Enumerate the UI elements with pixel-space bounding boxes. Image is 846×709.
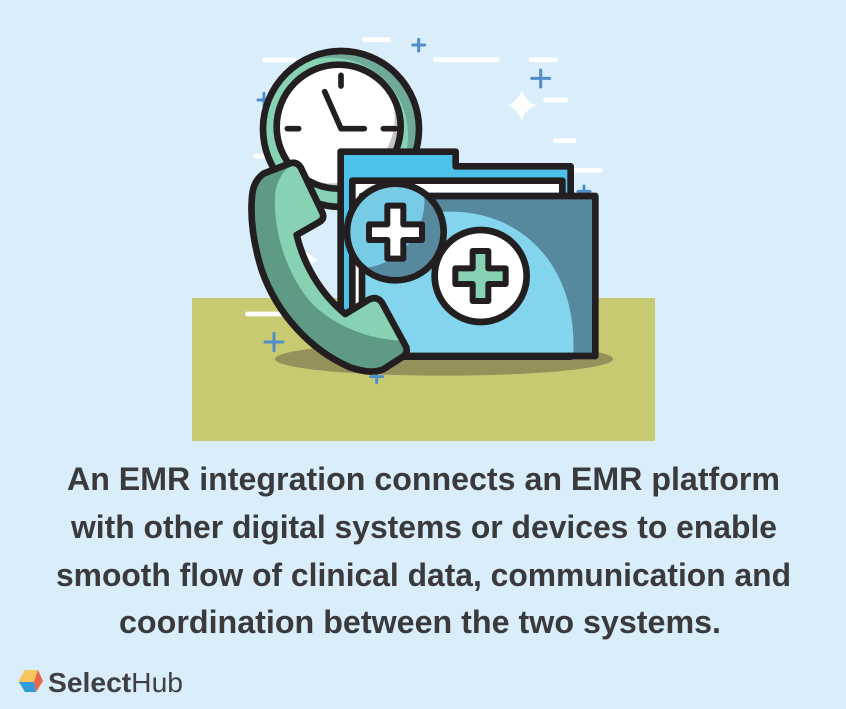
description text: An EMR integration connects an EMR platform bbox=[67, 461, 780, 497]
background dashes and sparkles bbox=[245, 37, 603, 383]
description text: with other digital systems or devices to enable bbox=[70, 509, 777, 545]
illustration bbox=[245, 37, 613, 383]
logo hexagon icon bbox=[19, 670, 43, 692]
paper sheet bbox=[352, 181, 562, 357]
description text: coordination between the two systems. bbox=[119, 604, 721, 640]
icon: white plus badge bbox=[435, 230, 527, 322]
logo wordmark: SelectHub bbox=[48, 667, 183, 698]
icon: clock bbox=[253, 51, 419, 212]
description text: smooth flow of clinical data, communication and bbox=[56, 557, 791, 593]
icon: folder back bbox=[341, 152, 571, 357]
logo: SelectHub bbox=[19, 667, 183, 698]
ground panel bbox=[192, 298, 655, 441]
icon: telephone handset bbox=[251, 163, 407, 372]
description text bbox=[56, 461, 791, 640]
icon: blue plus badge bbox=[347, 184, 444, 280]
shadow bbox=[275, 342, 613, 376]
icon: folder front bbox=[362, 196, 595, 356]
